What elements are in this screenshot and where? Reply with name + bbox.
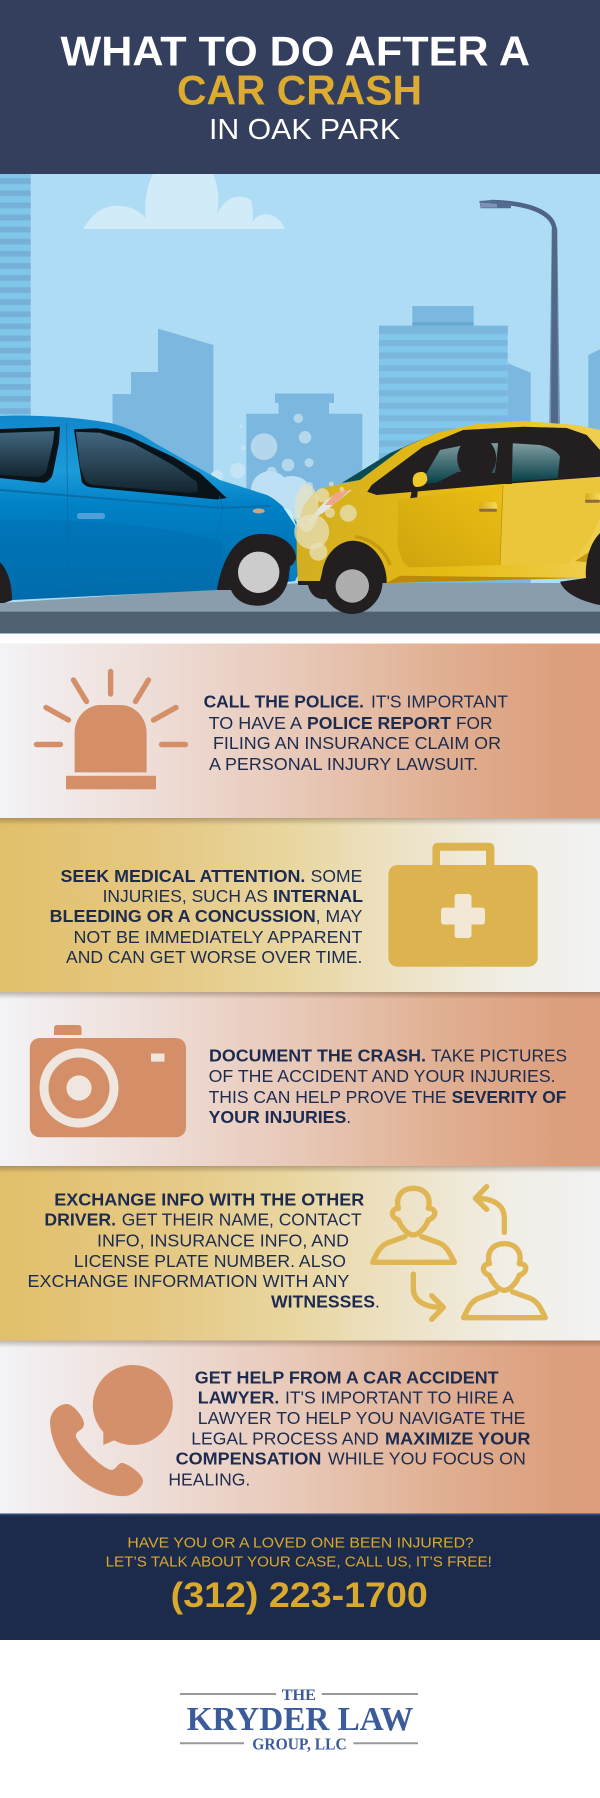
- text block: INJURIES, SUCH AS: [103, 886, 268, 906]
- logo: the kryder law group: GROUP, LLC: [252, 1734, 347, 1753]
- text block: LAWYER.: [198, 1387, 279, 1407]
- text block: TAKE PICTURES: [431, 1046, 567, 1066]
- text block: [209, 1046, 567, 1127]
- text block: TO HAVE A: [209, 713, 302, 733]
- cloud: [83, 174, 285, 229]
- wheel hub: [238, 552, 279, 593]
- skyline buildings: [0, 174, 600, 590]
- yellow car: [294, 421, 600, 614]
- logo: the kryder law group: THE: [282, 1685, 316, 1704]
- window surround: [367, 427, 600, 495]
- text block: .: [346, 1107, 351, 1127]
- text block: IT'S IMPORTANT: [371, 692, 508, 712]
- text block: EXCHANGE INFORMATION WITH ANY: [28, 1271, 350, 1291]
- panel: seek medical attention: [0, 818, 600, 992]
- headlight: [283, 507, 297, 528]
- front window: [74, 428, 227, 500]
- icon: telephone handset: [50, 1404, 143, 1496]
- phone number: (312) 223-1700: [171, 1576, 428, 1615]
- text block: .: [375, 1292, 380, 1312]
- rear wheel arch: [0, 562, 12, 603]
- logo: the kryder law group: KRYDER LAW: [187, 1701, 413, 1738]
- illustration: car crash scene: [0, 174, 600, 634]
- door handles: [479, 493, 600, 512]
- panel: exchange info: [0, 1166, 600, 1340]
- front tyre: [217, 534, 296, 606]
- text block: WHILE YOU FOCUS ON: [328, 1449, 526, 1469]
- mirror: [410, 487, 418, 500]
- text block: FILING AN INSURANCE CLAIM OR: [213, 733, 501, 753]
- rear window: [0, 427, 60, 483]
- text block: [168, 1367, 531, 1489]
- text block: LEGAL PROCESS AND: [191, 1429, 379, 1449]
- text block: INFO, INSURANCE INFO, AND: [97, 1230, 349, 1250]
- title line three: IN OAK PARK: [209, 114, 400, 146]
- text block: COMPENSATION: [176, 1449, 321, 1469]
- text block: WITNESSES: [271, 1292, 375, 1312]
- text block: FOR: [456, 713, 492, 733]
- text block: SEEK MEDICAL ATTENTION.: [60, 866, 305, 886]
- text block: LAWYER TO HELP YOU NAVIGATE THE: [198, 1408, 525, 1428]
- text block: MAXIMIZE YOUR: [385, 1429, 531, 1449]
- front tyre: [298, 541, 387, 614]
- text block: SOME: [311, 866, 362, 886]
- icon: first aid kit: [388, 843, 538, 967]
- text block: DRIVER.: [44, 1210, 116, 1230]
- arch highlight: [355, 537, 390, 565]
- text block: OF THE ACCIDENT AND YOUR INJURIES.: [209, 1066, 556, 1086]
- text block: IT'S IMPORTANT TO HIRE A: [285, 1387, 514, 1407]
- title line two: CAR CRASH: [177, 66, 422, 114]
- icon: speech bubble: [93, 1365, 173, 1445]
- text block: CALL THE POLICE.: [204, 692, 364, 712]
- text block: , MAY: [316, 906, 363, 926]
- text block: POLICE REPORT: [307, 713, 451, 733]
- text block: HEALING.: [168, 1469, 250, 1489]
- panel: call the police: [0, 644, 600, 818]
- text block: GET HELP FROM A CAR ACCIDENT: [195, 1367, 499, 1387]
- front hub: [336, 569, 369, 603]
- logo: the kryder law group: [180, 1685, 418, 1753]
- rear tyre: [560, 533, 600, 605]
- front side glass: [420, 443, 498, 484]
- text block: SEVERITY OF: [452, 1087, 567, 1107]
- text block: LICENSE PLATE NUMBER. ALSO: [74, 1251, 346, 1271]
- icon: two people exchanging information: [373, 1187, 545, 1319]
- blue car: [0, 416, 298, 606]
- text block: YOUR INJURIES: [209, 1107, 346, 1127]
- text block: NOT BE IMMEDIATELY APPARENT: [74, 927, 363, 947]
- door panels: [398, 485, 503, 568]
- text block: [28, 1190, 380, 1312]
- text block: DOCUMENT THE CRASH.: [209, 1046, 426, 1066]
- door handle: [77, 513, 105, 519]
- bumper: [290, 563, 298, 581]
- panel: get help from a lawyer: [0, 1340, 600, 1514]
- text block: AND CAN GET WORSE OVER TIME.: [66, 947, 362, 967]
- impact bubbles: [211, 414, 314, 520]
- driver silhouette: [457, 436, 496, 480]
- call to action band: [0, 1514, 600, 1640]
- sill: [387, 576, 583, 583]
- panel: document the crash: [0, 992, 600, 1166]
- text block: [204, 692, 508, 774]
- call to action band: LET’S TALK ABOUT YOUR CASE, CALL US, IT’S FREE!: [106, 1554, 492, 1571]
- side marker: [253, 508, 265, 514]
- text block: THIS CAN HELP PROVE THE: [209, 1087, 447, 1107]
- door outline: [67, 423, 223, 585]
- text block: GET THEIR NAME, CONTACT: [122, 1210, 362, 1230]
- text block: A PERSONAL INJURY LAWSUIT.: [209, 754, 478, 774]
- street lamp: [479, 200, 560, 424]
- text block: [50, 866, 363, 967]
- text block: EXCHANGE INFO WITH THE OTHER: [54, 1190, 365, 1210]
- title line one: WHAT TO DO AFTER A: [60, 28, 530, 74]
- icon: siren: [36, 672, 186, 789]
- icon: camera: [30, 1025, 186, 1137]
- rear side glass: [512, 443, 560, 482]
- road: [0, 583, 600, 633]
- call to action text: HAVE YOU OR A LOVED ONE BEEN INJURED?: [127, 1535, 474, 1552]
- headlight: [307, 490, 352, 528]
- text block: INTERNAL: [273, 886, 363, 906]
- pillar: [495, 441, 513, 484]
- text block: BLEEDING OR A CONCUSSION: [50, 906, 316, 926]
- impact haze: [294, 482, 357, 561]
- header band: [0, 0, 600, 174]
